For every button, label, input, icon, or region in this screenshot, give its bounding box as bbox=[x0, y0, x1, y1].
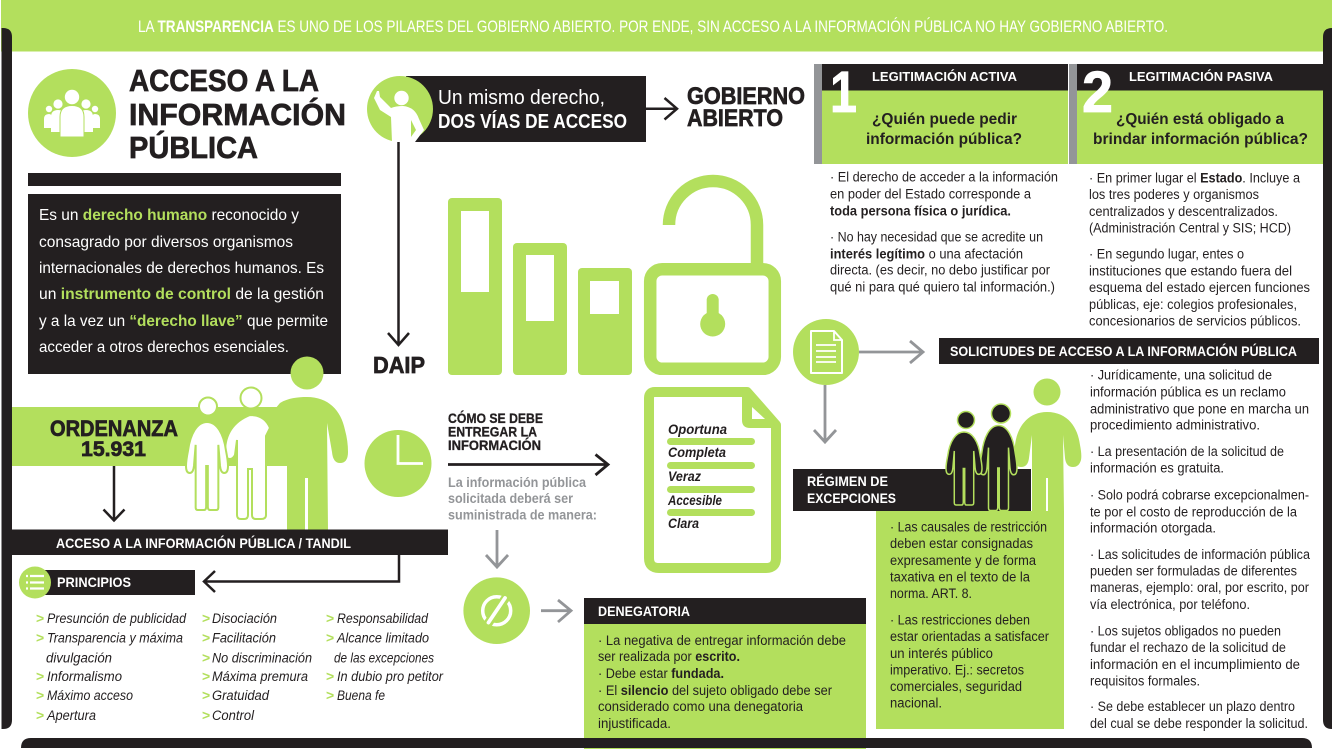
ordenanza band bbox=[12, 407, 288, 466]
panel: denegatoria: injustificada. bbox=[598, 716, 671, 731]
panel: definition text: y a la vez un “derecho llave” que permite bbox=[39, 313, 328, 330]
text: solicitudes: · Solo podrá cobrarse excepcionalmen- bbox=[1090, 488, 1309, 502]
text: solicitudes: vía electrónica, por teléfono. bbox=[1090, 597, 1250, 612]
heading: principios bbox=[19, 566, 195, 598]
top banner bbox=[1, 0, 1332, 52]
icon: binders bbox=[448, 198, 632, 375]
list: principios column 1: > bbox=[36, 630, 44, 646]
heading box: dos vías de acceso: Un mismo derecho, bbox=[438, 87, 605, 109]
arrow: ordenanza to tandil bbox=[104, 466, 124, 520]
list: principios column 1: > bbox=[36, 610, 44, 626]
panel: definition text: acceder a otros derechos esenciales. bbox=[39, 339, 289, 356]
heading: cómo entregar: INFORMACIÓN bbox=[448, 438, 541, 453]
list: principios column 3: In dubio pro petitor bbox=[337, 669, 443, 684]
heading: solicitudes: SOLICITUDES DE ACCESO A LA INFORMACIÓN PÚBLICA bbox=[950, 342, 1297, 359]
text: solicitudes: administrativo que pone en marcha un bbox=[1090, 402, 1309, 416]
text: suministrada bbox=[448, 475, 597, 522]
panel: denegatoria: · El silencio del sujeto obligado debe ser bbox=[598, 683, 832, 698]
text: legitimación activa: toda persona física o jurídica. bbox=[830, 204, 1011, 218]
text: solicitudes: fundar el rechazo de la solicitud de bbox=[1090, 640, 1286, 655]
text: legitimación pasiva: los tres poderes y organismos bbox=[1089, 187, 1259, 202]
heading box: dos vías de acceso: DOS VÍAS DE ACCESO bbox=[438, 110, 627, 133]
panel: denegatoria: · La negativa de entregar información debe bbox=[598, 633, 846, 648]
text: solicitudes: información otorgada. bbox=[1090, 520, 1216, 536]
arrow: to denegatoria bbox=[541, 600, 571, 622]
ordenanza band: 15.931 bbox=[81, 438, 146, 461]
list: principios column 1: Presunción de publicidad bbox=[47, 611, 186, 626]
text: legitimación activa: qué ni para qué quiero tal información.) bbox=[830, 280, 1055, 294]
list: principios column 2: Máxima premura bbox=[212, 669, 308, 684]
section bar: acceso tandil: ACCESO A LA INFORMACIÓN PÚBLICA / TANDIL bbox=[56, 534, 351, 551]
text: solicitudes: información en el incumplimiento de bbox=[1090, 657, 1300, 672]
list: principios column 3: > bbox=[326, 687, 334, 703]
panel: legitimación pasiva: LEGITIMACIÓN PASIVA bbox=[1129, 69, 1274, 84]
label: gobierno abierto: GOBIERNO bbox=[687, 83, 805, 110]
icon: person raising hand bbox=[367, 76, 433, 142]
title: PÚBLICA bbox=[129, 129, 258, 165]
panel: denegatoria: · Debe estar fundada. bbox=[598, 666, 724, 681]
icon: document with list: Clara bbox=[668, 516, 699, 531]
list: principios column 2: Facilitación bbox=[212, 630, 276, 646]
text: legitimación pasiva: centralizados y descentralizados. bbox=[1089, 204, 1278, 219]
arrow: to solicitudes bbox=[859, 341, 923, 363]
text: legitimación pasiva bbox=[1089, 170, 1310, 328]
list: principios column 2: Disociación bbox=[212, 611, 277, 626]
panel: legitimación pasiva bbox=[1069, 60, 1323, 164]
title underline bar bbox=[28, 173, 341, 186]
panel: legitimación activa: 1 bbox=[830, 60, 857, 125]
text: solicitudes bbox=[1090, 368, 1310, 731]
list: principios column 3: Responsabilidad bbox=[337, 611, 428, 626]
list: principios column 3 bbox=[326, 610, 443, 703]
text: legitimación pasiva: · En segundo lugar, entes o bbox=[1089, 246, 1244, 262]
icon: document with list bbox=[649, 388, 776, 568]
list: principios column 1: Informalismo bbox=[47, 669, 122, 684]
panel: régimen de excepciones: estar orientadas a satisfacer bbox=[890, 629, 1049, 644]
arrow: to gobierno abierto bbox=[646, 98, 677, 120]
text: legitimación pasiva: públicas, eje: colegios profesionales, bbox=[1089, 297, 1297, 312]
icon: open padlock bbox=[650, 181, 775, 369]
section bar: acceso tandil bbox=[12, 530, 448, 555]
title: ACCESO A LA bbox=[129, 63, 319, 98]
panel: régimen de excepciones: deben estar consignadas bbox=[890, 536, 1033, 551]
panel: régimen de excepciones bbox=[793, 469, 1064, 729]
panel: legitimación pasiva: brindar información pública? bbox=[1093, 131, 1308, 148]
text: legitimación activa: interés legítimo o una afectación bbox=[830, 246, 1023, 262]
text: solicitudes: te por el costo de reproducción de la bbox=[1090, 504, 1297, 520]
figure: outlined child bbox=[186, 398, 228, 510]
panel: denegatoria: DENEGATORIA bbox=[598, 603, 690, 619]
heading: cómo entregar: CÓMO SE DEBE bbox=[448, 411, 543, 426]
panel: denegatoria bbox=[584, 598, 866, 749]
panel: legitimación activa: ¿Quién puede pedir bbox=[872, 111, 1017, 128]
list: principios column 1: Transparencia y máxima bbox=[47, 630, 183, 646]
text: solicitudes: información es gratuita. bbox=[1090, 460, 1224, 476]
panel: definition text: internacionales de derechos humanos. Es bbox=[39, 260, 324, 277]
text: solicitudes: · Las solicitudes de información pública bbox=[1090, 547, 1310, 562]
heading: solicitudes bbox=[939, 338, 1319, 364]
list: principios column 1: > bbox=[36, 687, 44, 703]
icon: document with list: Veraz bbox=[668, 469, 701, 484]
bottom bar bbox=[21, 738, 1312, 748]
panel: legitimación activa bbox=[814, 60, 1068, 164]
list: principios column 2: > bbox=[202, 668, 210, 684]
panel: régimen de excepciones: taxativa en el texto de la bbox=[890, 570, 1030, 584]
label: DAIP: DAIP bbox=[373, 352, 425, 378]
text: legitimación pasiva: (Administración Central y SIS; HCD) bbox=[1089, 220, 1291, 236]
list: principios column 2 bbox=[202, 610, 312, 723]
list: principios column 1: divulgación bbox=[46, 650, 112, 666]
list: principios column 2: Control bbox=[212, 708, 255, 723]
panel: legitimación activa: LEGITIMACIÓN ACTIVA bbox=[872, 69, 1018, 84]
panel: régimen de excepciones: comerciales, seguridad bbox=[890, 679, 1022, 694]
ordenanza band: ORDENANZA bbox=[50, 416, 178, 441]
list: principios column 3: de las excepciones bbox=[334, 650, 434, 666]
panel: régimen de excepciones: nacional. bbox=[890, 696, 942, 710]
panel: régimen de excepciones: · Las causales de restricción bbox=[890, 520, 1047, 534]
text: legitimación activa: · El derecho de acceder a la información bbox=[830, 170, 1058, 184]
text: legitimación pasiva: · En primer lugar el Estado. Incluye a bbox=[1089, 170, 1300, 186]
panel: régimen de excepciones: · Las restricciones deben bbox=[890, 612, 1030, 628]
text: legitimación pasiva: esquema del estado ejercen funciones bbox=[1089, 280, 1310, 295]
figure: dark adult bbox=[980, 404, 1017, 510]
arrow: to denegatoria icon bbox=[486, 530, 508, 567]
icon: people group bbox=[28, 69, 116, 157]
list: principios column 3: Alcance limitado bbox=[336, 630, 429, 646]
panel: régimen de excepciones: imperativo. Ej.: secretos bbox=[890, 662, 1024, 678]
text: solicitudes: requisitos formales. bbox=[1090, 674, 1200, 688]
list: principios column 3: Buena fe bbox=[337, 688, 385, 703]
text: legitimación activa: directa. (es decir, no debo justificar por bbox=[830, 262, 1050, 278]
text: solicitudes: del cual se debe responder la solicitud. bbox=[1090, 716, 1308, 731]
list: principios column 2: Gratuidad bbox=[212, 688, 269, 703]
panel: definition text: Es un derecho humano reconocido y bbox=[39, 207, 299, 224]
panel: legitimación pasiva: 2 bbox=[1082, 60, 1113, 125]
text: solicitudes: · Los sujetos obligados no pueden bbox=[1090, 624, 1281, 638]
panel: régimen de excepciones: EXCEPCIONES bbox=[807, 490, 896, 506]
list: principios column 1: Apertura bbox=[46, 708, 96, 723]
panel: definition text: un instrumento de control de la gestión bbox=[39, 286, 324, 303]
panel: régimen de excepciones: un interés público bbox=[890, 646, 993, 661]
title bbox=[129, 63, 346, 165]
panel: régimen de excepciones: norma. ART. 8. bbox=[890, 586, 972, 601]
label: gobierno abierto bbox=[687, 83, 805, 132]
icon: denied symbol bbox=[463, 577, 530, 644]
text: legitimación activa bbox=[830, 170, 1058, 294]
arrow: to DAIP bbox=[388, 142, 409, 345]
panel: legitimación pasiva: ¿Quién está obligado a bbox=[1116, 111, 1284, 128]
heading: cómo entregar bbox=[448, 411, 543, 453]
arrow: tandil to principios bbox=[204, 555, 399, 592]
text: legitimación pasiva: concesionarios de servicios públicos. bbox=[1089, 314, 1301, 328]
text: suministrada: La información pública bbox=[448, 475, 586, 490]
list: principios column 2: > bbox=[202, 610, 210, 626]
icon: document with list: Accesible bbox=[667, 493, 722, 508]
list: principios column 1: Máximo acceso bbox=[47, 688, 133, 703]
text: solicitudes: · Jurídicamente, una solicitud de bbox=[1090, 368, 1272, 382]
icon: document with list: Completa bbox=[668, 445, 726, 460]
figure: dark child bbox=[946, 412, 982, 505]
list: principios column 2: > bbox=[202, 630, 210, 646]
text: legitimación activa: en poder del Estado corresponde a bbox=[830, 186, 1031, 202]
list: principios column 3: > bbox=[326, 630, 334, 646]
list: principios column 2: > bbox=[202, 687, 210, 703]
text: legitimación activa: · No hay necesidad que se acredite un bbox=[830, 230, 1043, 244]
frame: left bar bbox=[2, 28, 12, 729]
list: principios column 2: > bbox=[202, 650, 210, 666]
text: suministrada: solicitada deberá ser bbox=[448, 491, 574, 506]
heading box: dos vías de acceso bbox=[406, 76, 646, 142]
text: solicitudes: procedimiento administrativo. bbox=[1090, 418, 1260, 432]
list: principios column 1: > bbox=[36, 668, 44, 684]
icon: request document bbox=[793, 319, 859, 385]
list: principios column 3: > bbox=[326, 668, 334, 684]
list: principios column 2: > bbox=[202, 707, 210, 723]
panel: denegatoria: ser realizada por escrito. bbox=[598, 649, 740, 664]
icon: clock bbox=[364, 430, 432, 497]
text: solicitudes: · La presentación de la solicitud de bbox=[1090, 444, 1284, 459]
heading: cómo entregar: ENTREGAR LA bbox=[448, 424, 537, 440]
figure: outlined adult bbox=[225, 388, 270, 519]
text: solicitudes: pueden ser formuladas de diferentes bbox=[1090, 564, 1297, 578]
text: legitimación pasiva: instituciones que estando fuera del bbox=[1089, 264, 1292, 278]
text: solicitudes: maneras, ejemplo: oral, por escrito, por bbox=[1090, 580, 1309, 595]
heading: principios: PRINCIPIOS bbox=[57, 574, 131, 590]
list: principios column 3: > bbox=[326, 610, 334, 626]
panel: definition text: consagrado por diversos organismos bbox=[39, 234, 293, 251]
panel: legitimación activa: información pública? bbox=[866, 131, 1022, 148]
text: solicitudes: · Se debe establecer un plazo dentro bbox=[1090, 699, 1295, 714]
text: suministrada: suministrada de manera: bbox=[448, 508, 597, 522]
text: solicitudes: información pública es un reclamo bbox=[1090, 384, 1286, 400]
panel: régimen de excepciones: expresamente y de forma bbox=[890, 553, 1036, 568]
figure: large green person, excepciones bbox=[1014, 378, 1081, 512]
list: principios column 2: No discriminación bbox=[212, 650, 312, 666]
arrow: to document bbox=[448, 454, 608, 475]
list: principios column 1 bbox=[36, 610, 186, 723]
label: gobierno abierto: ABIERTO bbox=[687, 105, 783, 132]
icon: document with list: Oportuna bbox=[668, 422, 727, 437]
title: INFORMACIÓN bbox=[129, 96, 346, 132]
arrow: to excepciones bbox=[814, 385, 836, 442]
figure: large green person bbox=[270, 356, 348, 530]
panel: régimen de excepciones: RÉGIMEN DE bbox=[807, 473, 888, 489]
frame: right bar bbox=[1323, 28, 1332, 729]
panel: denegatoria: considerado como una denegatoria bbox=[598, 699, 803, 714]
panel: definition text bbox=[28, 194, 341, 374]
list: principios column 1: > bbox=[36, 707, 44, 723]
